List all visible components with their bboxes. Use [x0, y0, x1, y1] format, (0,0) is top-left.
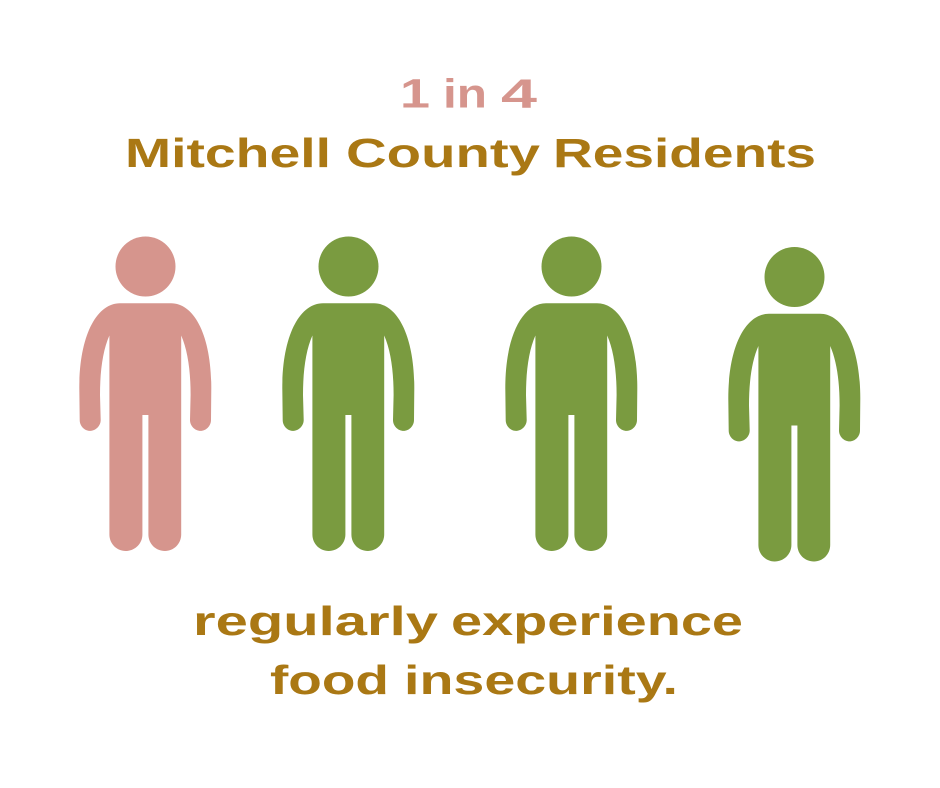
text: regularly experience — [193, 598, 743, 644]
text: regularly experience: regularly — [193, 598, 438, 644]
heading: 1 in 4 — [400, 70, 537, 116]
heading: 1 in 4: in — [443, 70, 487, 116]
icon: person, green 1 — [282, 236, 414, 551]
heading: Mitchell County Residents: Mitchell — [125, 130, 331, 176]
text: food insecurity. — [270, 657, 678, 703]
icon: person, green 3 — [728, 247, 860, 562]
icon: person, green 2 — [505, 236, 637, 551]
text: food insecurity.: food — [270, 657, 389, 703]
text: food insecurity.: insecurity. — [404, 657, 678, 703]
text: regularly experience: experience — [451, 598, 743, 644]
icon: person, pink — [79, 236, 211, 551]
heading: Mitchell County Residents: County — [346, 130, 540, 176]
heading: 1 in 4: 1 — [400, 70, 430, 116]
heading: 1 in 4: 4 — [501, 70, 537, 116]
heading: Mitchell County Residents — [125, 130, 816, 176]
heading: Mitchell County Residents: Residents — [553, 130, 816, 176]
